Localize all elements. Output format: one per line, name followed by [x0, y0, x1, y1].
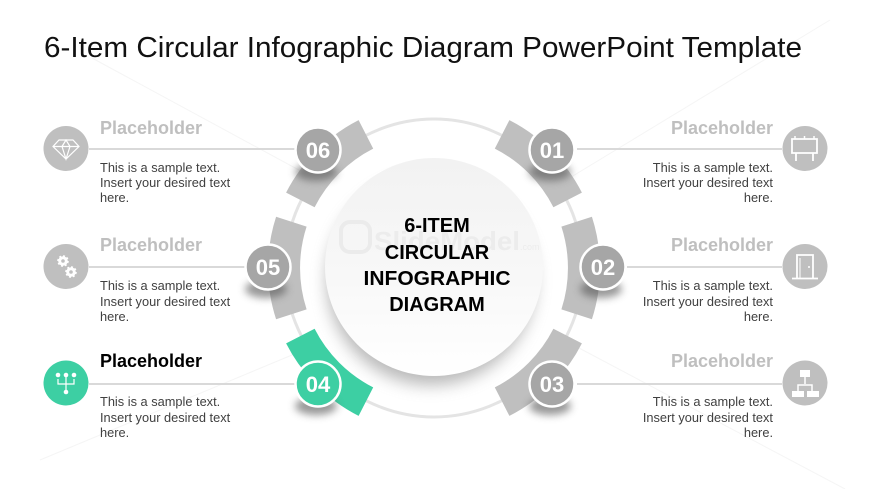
text block 01: here.: [744, 190, 773, 205]
segment 01: [495, 120, 582, 207]
text block 04: [100, 351, 231, 440]
text block 05: Placeholder: [100, 235, 202, 255]
badge 03: 03: [540, 372, 564, 397]
centre heading: 6-ITEM: [404, 215, 470, 237]
text block 02: Placeholder: [671, 235, 773, 255]
outer ring: [285, 119, 583, 417]
badge 02: [580, 244, 626, 298]
text block 05: here.: [100, 309, 129, 324]
icon: diamond: [44, 126, 88, 171]
segment 03: [495, 329, 582, 416]
watermark: [341, 222, 540, 256]
watermark: SlideModel: [374, 226, 520, 256]
text block 02: [643, 235, 773, 324]
badge 06: 06: [306, 138, 330, 163]
badge 01: [529, 128, 574, 181]
text block 04: Insert your desired text: [100, 410, 231, 425]
text block 05: This is a sample text.: [100, 278, 220, 293]
text block 01: Placeholder: [671, 118, 773, 138]
text block 01: This is a sample text.: [653, 160, 773, 175]
text block 03: Insert your desired text: [643, 410, 773, 425]
segment 02: [561, 217, 600, 319]
text block 03: here.: [744, 425, 773, 440]
text block 06: Insert your desired text: [100, 175, 231, 190]
centre heading: [364, 215, 510, 316]
text block 02: This is a sample text.: [653, 278, 773, 293]
badge 06: [295, 128, 340, 181]
text block 03: Placeholder: [671, 351, 773, 371]
segment 06: [286, 120, 373, 207]
text block 05: [100, 235, 231, 324]
badge 04: 04: [306, 372, 331, 397]
icon: door: [782, 244, 828, 289]
text block 06: here.: [100, 190, 129, 205]
centre disc: [325, 158, 543, 385]
text block 06: This is a sample text.: [100, 160, 220, 175]
text block 04: here.: [100, 425, 129, 440]
text block 02: Insert your desired text: [643, 294, 773, 309]
text block 03: [643, 351, 773, 440]
title: 6-Item Circular Infographic Diagram PowerPoint Template: [44, 32, 802, 64]
icon: flowchart: [782, 360, 828, 406]
centre heading: CIRCULAR: [385, 242, 490, 264]
centre heading: INFOGRAPHIC: [364, 268, 510, 290]
segment 05: [268, 217, 307, 319]
icon: gears: [44, 244, 88, 289]
segment 04: [286, 329, 373, 416]
text block 05: Insert your desired text: [100, 294, 231, 309]
badge 01: 01: [540, 138, 564, 163]
text block 01: [643, 118, 773, 205]
text block 06: [100, 118, 231, 205]
text block 02: here.: [744, 309, 773, 324]
badge 02: 02: [591, 255, 615, 280]
badge 03: [529, 362, 574, 415]
badge 05: 05: [256, 255, 280, 280]
text block 06: Placeholder: [100, 118, 202, 138]
centre heading: DIAGRAM: [389, 294, 485, 316]
icon: hierarchy tree: [44, 360, 88, 406]
text block 04: Placeholder: [100, 351, 202, 371]
text block 01: Insert your desired text: [643, 175, 773, 190]
text block 03: This is a sample text.: [653, 394, 773, 409]
watermark: .com: [520, 242, 540, 252]
badge 05: [245, 244, 290, 298]
icon: billboard: [782, 126, 828, 171]
text block 04: This is a sample text.: [100, 394, 220, 409]
badge 04: [295, 362, 340, 415]
